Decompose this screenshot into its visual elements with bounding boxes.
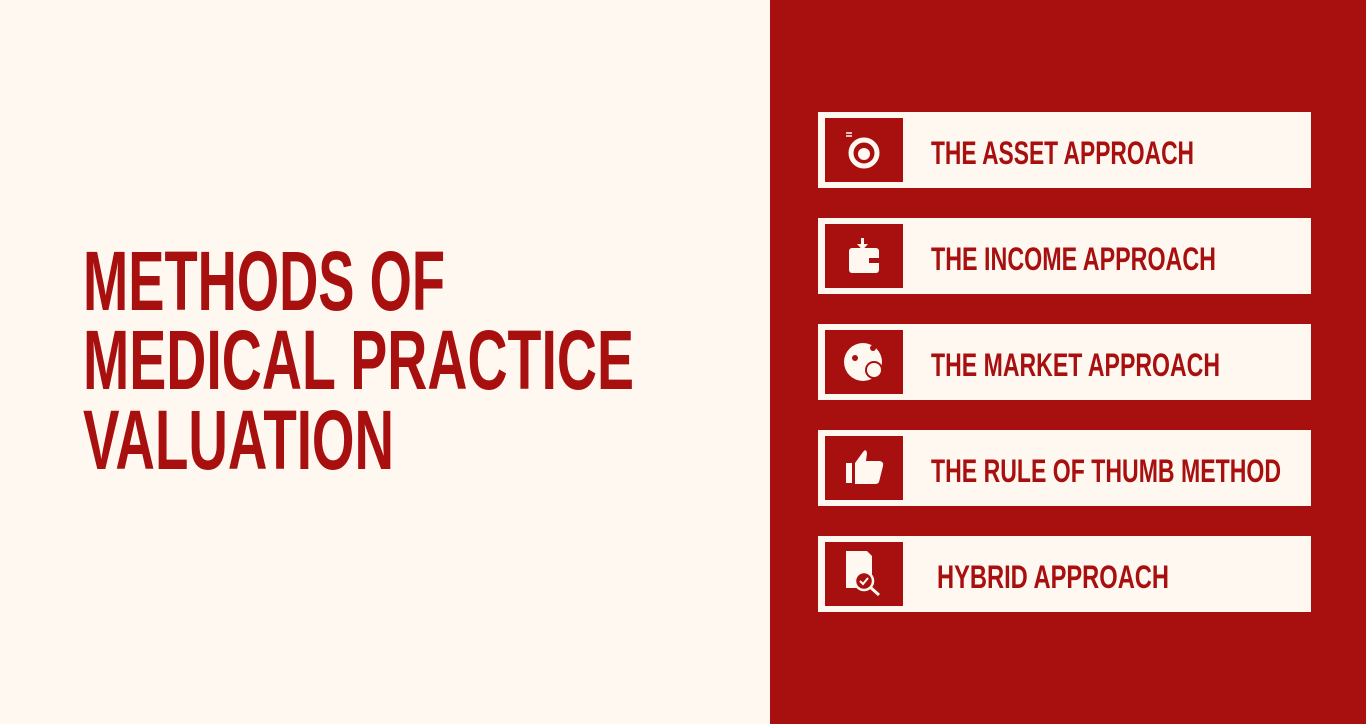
icon: money bag chart (846, 133, 877, 166)
icon: thumbs up (846, 450, 883, 484)
item: asset approach: THE ASSET APPROACH (931, 135, 1194, 171)
item: hybrid approach: HYBRID APPROACH (937, 559, 1169, 595)
icon: document with magnifier (846, 551, 879, 595)
item: income approach: THE INCOME APPROACH (931, 241, 1216, 277)
item: market approach: THE MARKET APPROACH (931, 347, 1220, 383)
item: market approach (818, 324, 1311, 400)
icon: wallet (849, 238, 879, 273)
right panel background (770, 0, 1366, 724)
title: MEDICAL PRACTICE (83, 313, 634, 407)
icon: globe with pins (844, 343, 883, 381)
item: income approach (818, 218, 1311, 294)
item: asset approach (818, 112, 1311, 188)
item: rule of thumb (818, 430, 1311, 506)
title: METHODS OF (83, 234, 445, 328)
title (83, 234, 634, 487)
title: VALUATION (83, 393, 394, 487)
item: hybrid approach (818, 536, 1311, 612)
